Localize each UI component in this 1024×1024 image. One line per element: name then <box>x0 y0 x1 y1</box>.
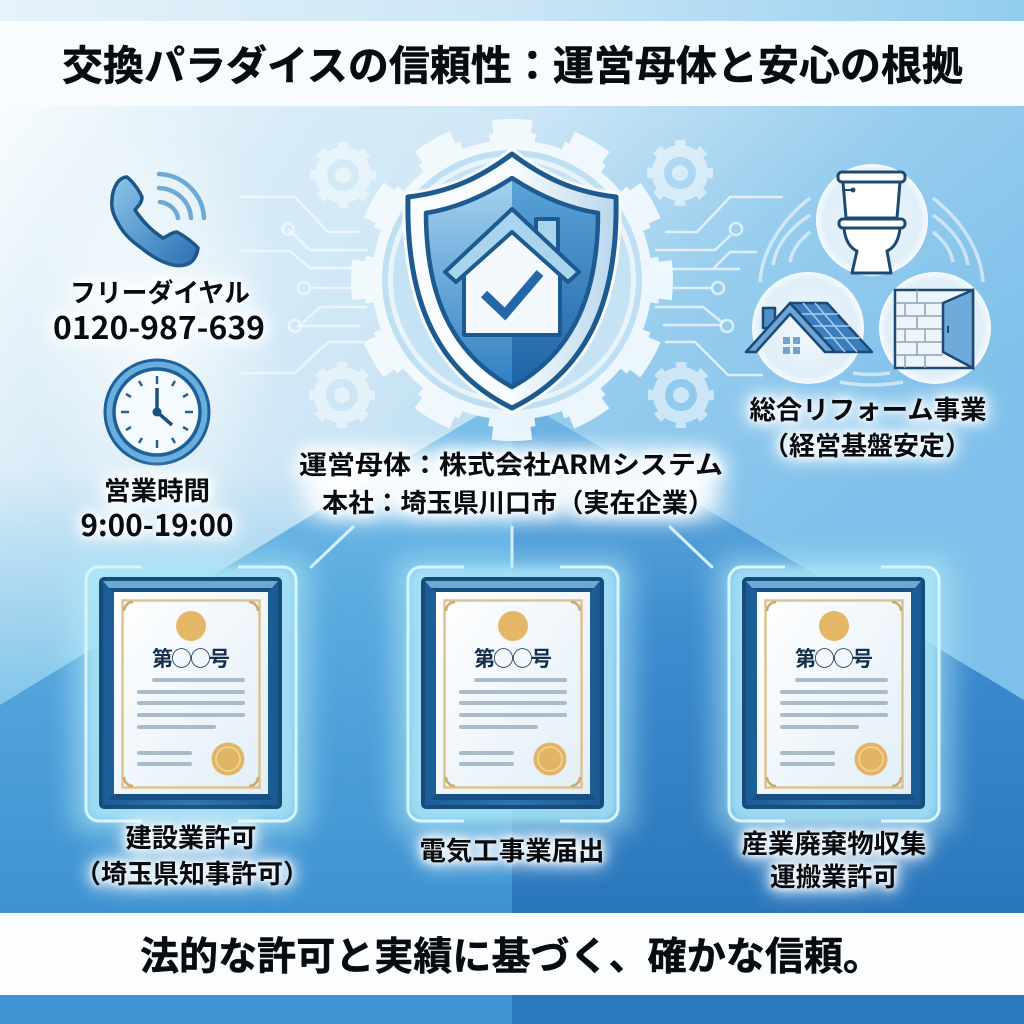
phone text <box>53 273 265 348</box>
icon: phone <box>112 174 204 266</box>
icon: clock <box>105 360 209 464</box>
title: 交換パラダイスの信頼性：運営母体と安心の根拠 <box>62 32 963 92</box>
circuit lines <box>240 197 783 375</box>
renovation text: （経営基盤安定） <box>763 426 971 463</box>
icon: renovation circles <box>746 164 991 385</box>
company text: 運営母体：株式会社ARMシステム <box>299 445 723 482</box>
footer band <box>0 913 1024 1024</box>
icon: wall and door <box>895 290 973 368</box>
panel: certificate 3: 運搬業許可 <box>770 857 898 894</box>
panel: certificate 2 <box>392 555 634 868</box>
panel: certificate 1: 第○○号 <box>152 643 230 673</box>
renovation text: 総合リフォーム事業 <box>750 390 986 427</box>
company text <box>299 445 723 520</box>
connector lines <box>311 527 712 567</box>
icon: shield <box>408 154 616 408</box>
hours text: 営業時間 <box>104 471 210 508</box>
renovation text <box>750 390 986 463</box>
panel: certificate 3 <box>713 555 955 894</box>
small gears <box>313 144 710 424</box>
icon: toilet <box>838 172 905 273</box>
title band <box>0 0 1024 106</box>
panel: certificate 1: （埼玉県知事許可） <box>75 854 309 891</box>
icon: house <box>445 209 579 335</box>
panel: certificate 3: 産業廃棄物収集 <box>742 824 926 861</box>
phone text: フリーダイヤル <box>70 273 250 310</box>
panel: certificate 2: 第○○号 <box>474 643 552 673</box>
icon: roof <box>746 303 872 354</box>
phone text: 0120-987-639 <box>53 303 265 348</box>
hours text <box>80 471 234 545</box>
panel: certificate 3: 第○○号 <box>795 643 873 673</box>
large gear <box>362 130 662 430</box>
footer text: 法的な許可と実績に基づく、確かな信頼。 <box>140 926 882 982</box>
panel: certificate 1: 建設業許可 <box>126 818 256 855</box>
panel: certificate 1 <box>70 555 312 891</box>
company text: 本社：埼玉県川口市（実在企業） <box>322 483 714 520</box>
hours text: 9:00-19:00 <box>80 501 234 545</box>
panel: certificate 2: 電気工事業届出 <box>420 831 604 868</box>
